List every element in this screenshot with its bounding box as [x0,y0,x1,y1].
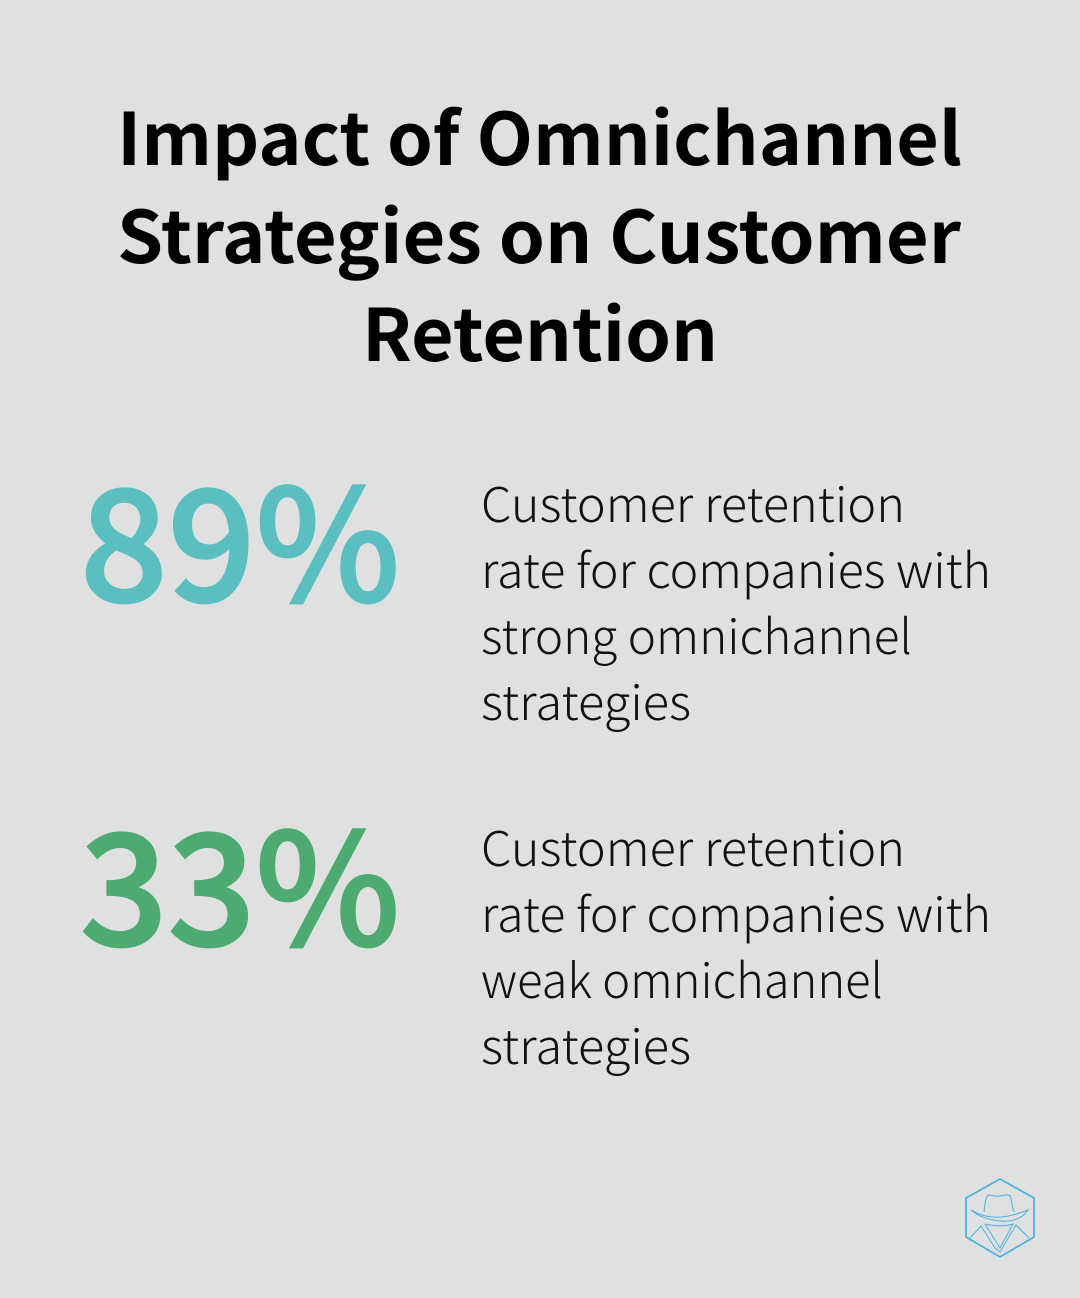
text: weak omnichannel description: weak omnichannel [481,942,883,1012]
text: weak omnichannel description: rate for companies with [481,876,991,946]
icon: logo hexagon with hat [966,1179,1034,1257]
text: weak omnichannel description: Customer retention [481,810,905,880]
stat: 89%: 89% [80,423,400,646]
text: strong omnichannel description: strategies [481,664,691,734]
text: strong omnichannel description [481,466,991,734]
text: weak omnichannel description [481,810,991,1078]
title: Impact of Omnichannel [117,81,962,186]
text: strong omnichannel description: strong omnichannel [481,598,912,668]
text: strong omnichannel description: rate for companies with [481,532,991,602]
title: Strategies on Customer [117,179,962,284]
stat: 33%: 33% [80,767,400,990]
text: weak omnichannel description: strategies [481,1008,691,1078]
text: strong omnichannel description: Customer retention [481,466,905,536]
title: Retention [362,277,718,382]
title [117,81,962,382]
